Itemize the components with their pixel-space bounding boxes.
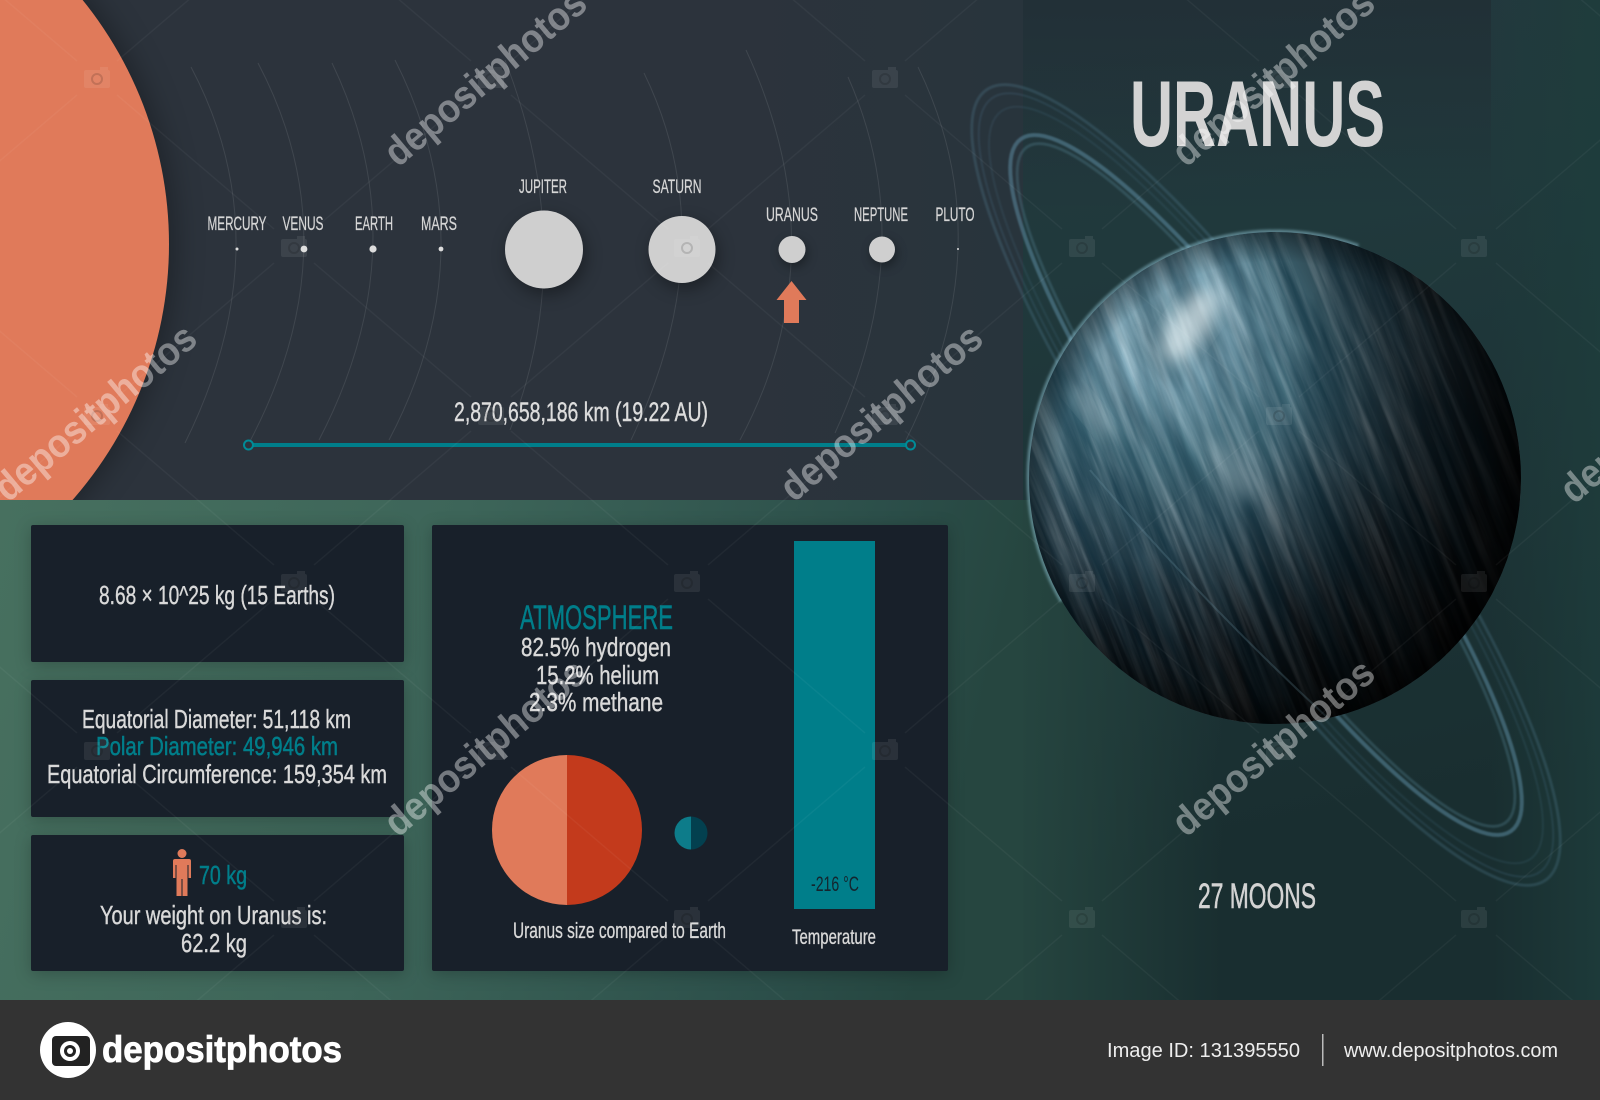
methane: 2.3% methane (529, 687, 663, 717)
watermarks: depositphotos (1164, 650, 1383, 845)
planet: Mars (421, 214, 457, 251)
watermarks: depositphotos (772, 315, 991, 510)
planet: Earth: EARTH (355, 214, 393, 235)
panel: weight (31, 835, 404, 971)
weight on Uranus: Your weight on Uranus is: (100, 900, 327, 930)
planet: Neptune: NEPTUNE (854, 205, 908, 226)
weight value: 62.2 kg (181, 928, 247, 958)
equatorial circumference: Equatorial Circumference: 159,354 km (47, 759, 387, 789)
temperature value: -216 °C (811, 873, 859, 896)
planet surface (1029, 232, 1521, 724)
planet: Venus: VENUS (282, 214, 324, 235)
equatorial diameter: Equatorial Diameter: 51,118 km (82, 704, 351, 734)
panel: mass (31, 525, 404, 662)
Earth size circle (674, 816, 708, 850)
planet: Mercury (208, 214, 267, 250)
panel: atmosphere, size and temperature (432, 525, 948, 971)
watermarks (0, 0, 1600, 845)
footer logo icon (40, 1022, 96, 1078)
distance label: 2,870,658,186 km (19.22 AU) (454, 397, 708, 427)
planet: Saturn: SATURN (652, 177, 702, 198)
hydrogen: 82.5% hydrogen (521, 632, 671, 662)
image id: Image ID: 131395550 (1107, 1040, 1300, 1062)
planet: Mars: MARS (421, 214, 457, 235)
moons label: 27 MOONS (1198, 877, 1316, 916)
helium: 15.2% helium (536, 660, 659, 690)
planet: Jupiter: JUPITER (519, 177, 567, 198)
polar diameter: Polar Diameter: 49,946 km (96, 731, 338, 761)
Uranus size circle (492, 755, 642, 905)
planet: Mercury: MERCURY (208, 214, 267, 235)
planet: Venus (282, 214, 324, 252)
mass text: 8.68 × 10^25 kg (15 Earths) (99, 580, 335, 610)
title: URANUS (1130, 61, 1385, 166)
watermark cameras (84, 67, 1487, 928)
planet: Pluto: PLUTO (936, 205, 974, 226)
footer logo text: depositphotos (102, 1029, 342, 1070)
size caption: Uranus size compared to Earth (513, 918, 726, 943)
watermarks: depositphotos (376, 650, 595, 845)
planet: Uranus: URANUS (766, 205, 818, 226)
arrow pointing to Uranus (776, 281, 806, 323)
website: www.depositphotos.com (1343, 1040, 1558, 1062)
planet glow (939, 142, 1600, 814)
atmosphere heading: ATMOSPHERE (520, 599, 673, 637)
right edge tint (1491, 0, 1600, 1000)
sun (0, 0, 176, 500)
planet: Saturn (648, 177, 716, 283)
footer divider (1322, 1034, 1324, 1066)
panel: solar system background (0, 0, 1023, 500)
planet: Jupiter (505, 177, 583, 288)
orbit lines (185, 50, 958, 443)
planet: Pluto (936, 205, 974, 250)
icon: person (173, 849, 191, 896)
planet Uranus (1025, 228, 1521, 724)
cloud streaks (1029, 232, 1521, 724)
title band (1023, 0, 1491, 210)
planet: Neptune (854, 205, 908, 262)
rings of Uranus (895, 25, 1600, 945)
distance scale line (244, 440, 915, 450)
panel: diameters (31, 680, 404, 817)
temperature bar (794, 541, 875, 909)
panel: solar system diagram (0, 0, 974, 500)
temperature caption: Temperature (792, 926, 876, 949)
panel: stats background (0, 500, 1023, 1000)
planet: Uranus (766, 205, 818, 263)
planet: Earth (355, 214, 393, 253)
footer bar (0, 1000, 1600, 1100)
weight on Earth: 70 kg (199, 860, 247, 890)
stats background fade (1023, 500, 1223, 1000)
